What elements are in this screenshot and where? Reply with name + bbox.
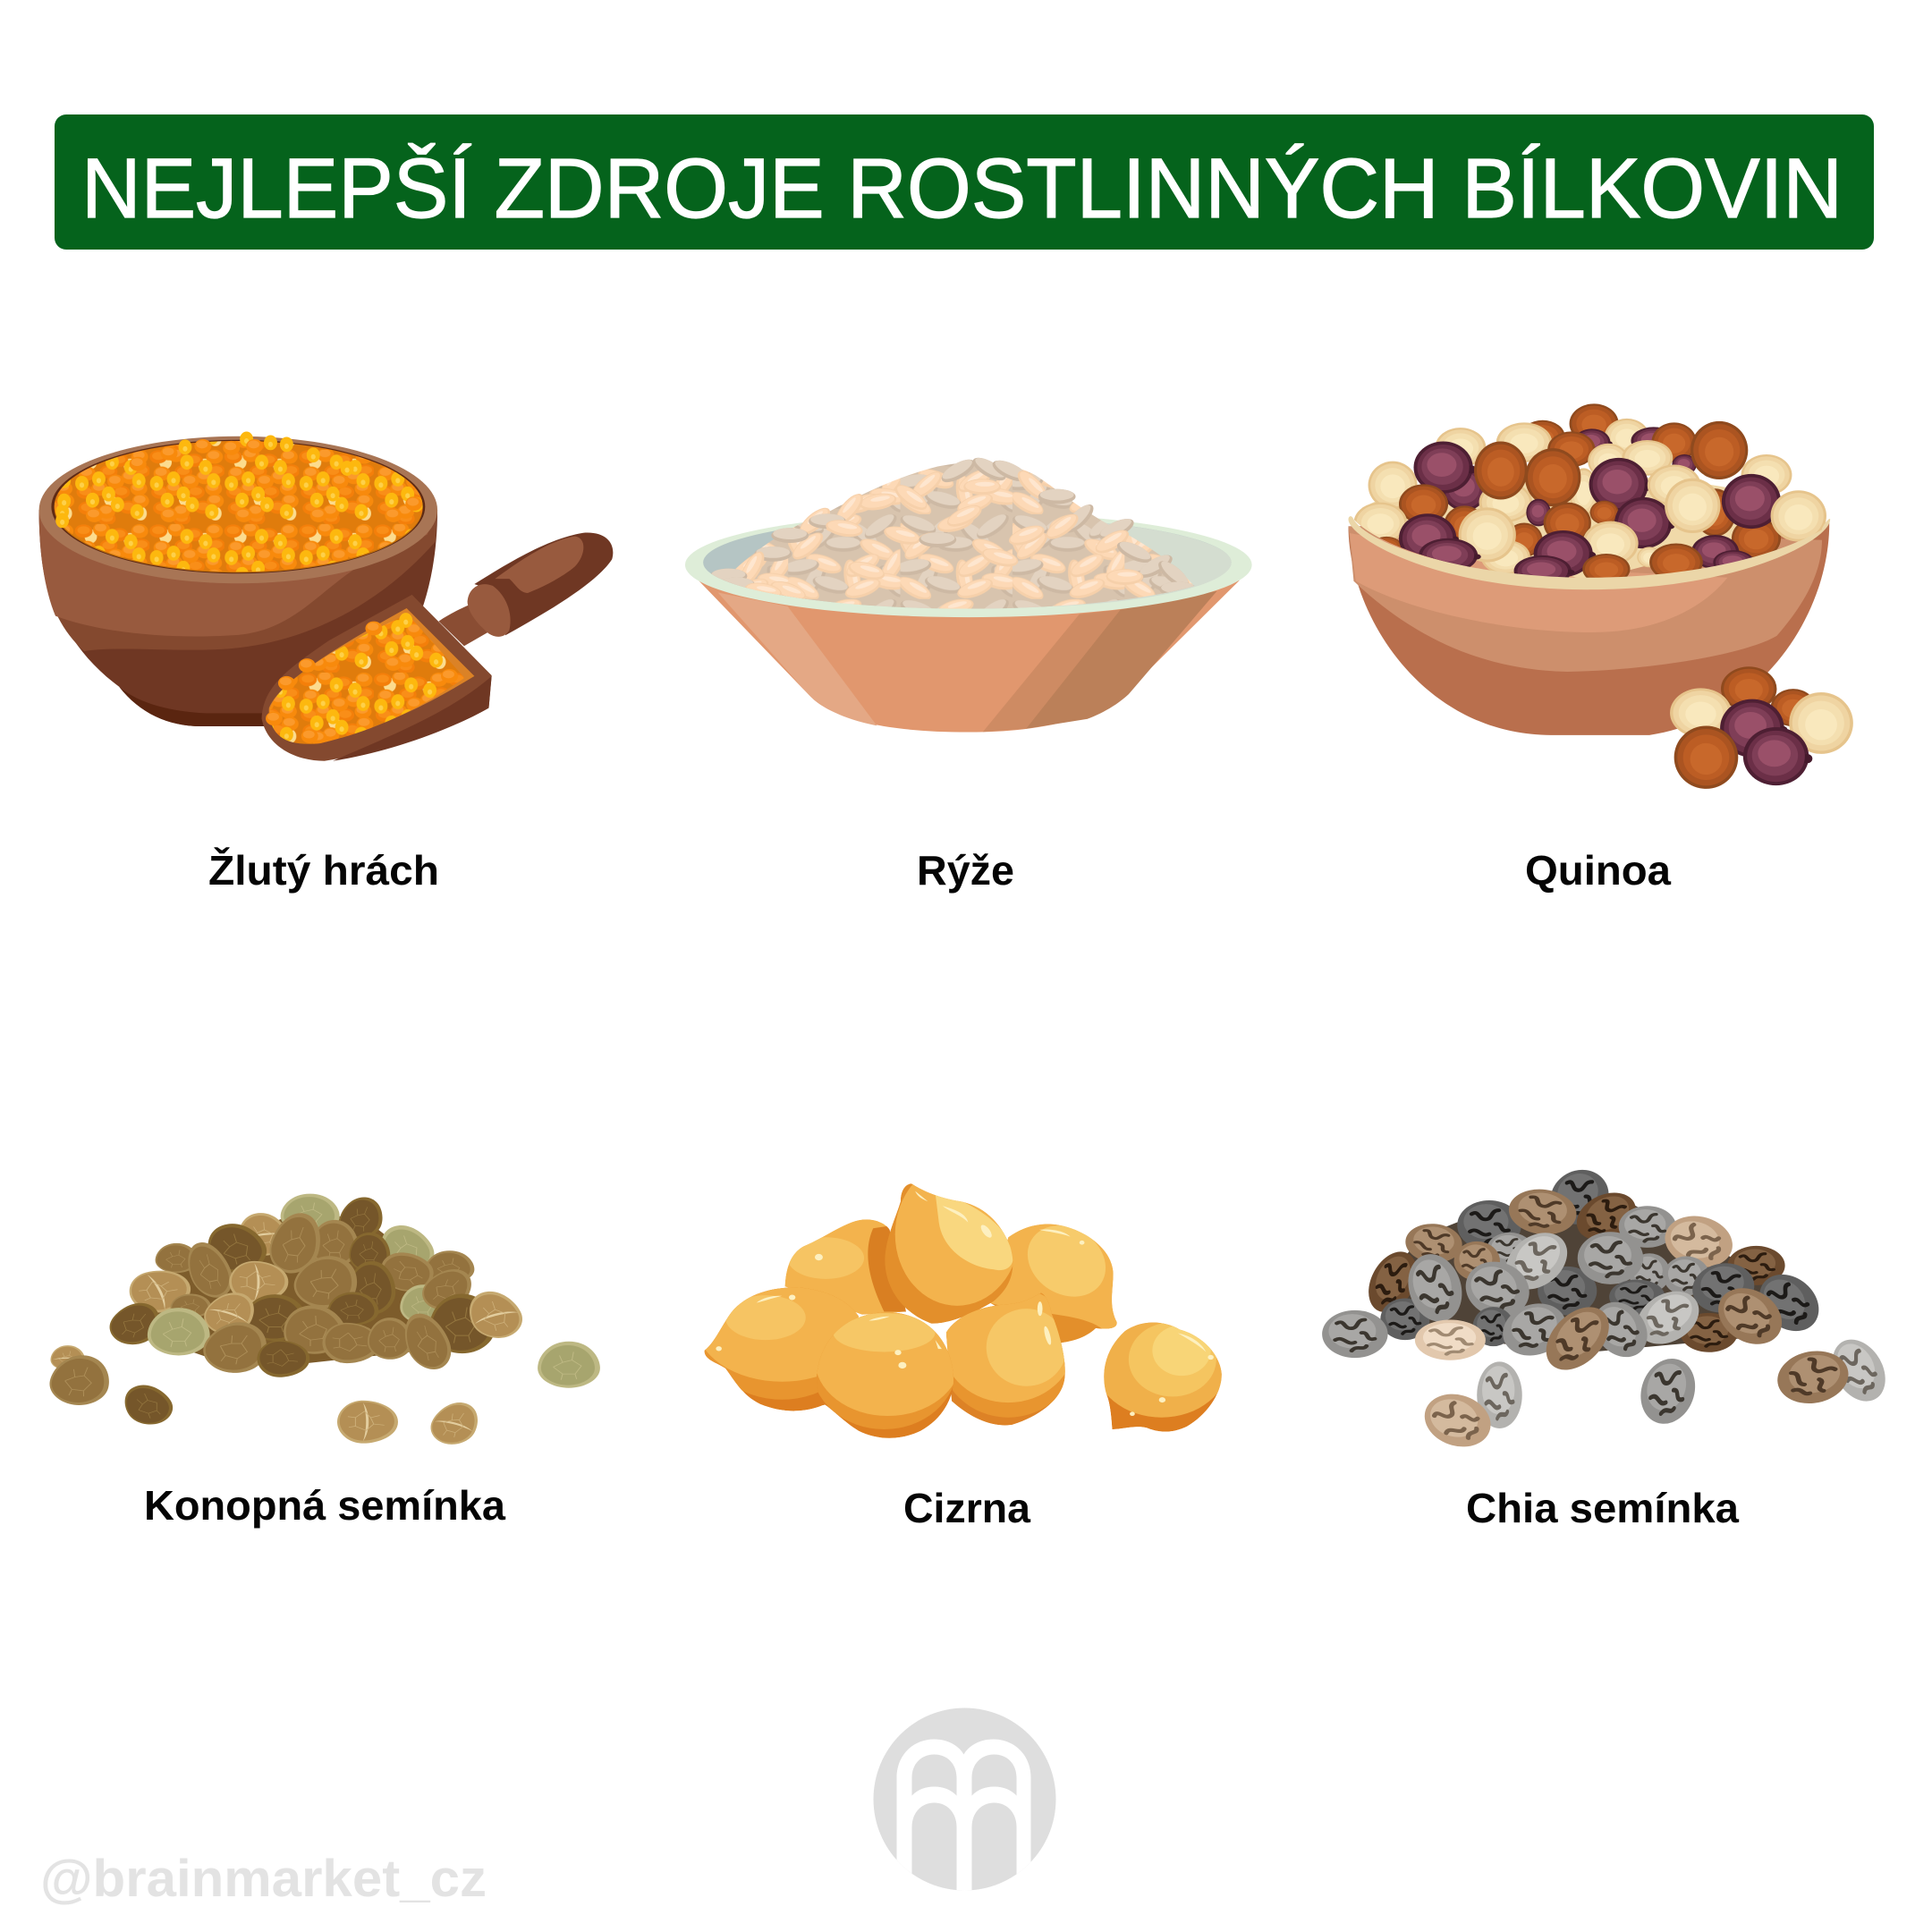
panel: rice bbox=[685, 453, 1252, 894]
icon: pile of chia seeds bbox=[1322, 1166, 1894, 1455]
title: NEJLEPŠÍ ZDROJE ROSTLINNÝCH BÍLKOVIN bbox=[81, 141, 1843, 236]
lentils in bowl bbox=[54, 432, 428, 573]
loose hemp seeds bbox=[45, 1342, 600, 1449]
quinoa seeds in bowl bbox=[1353, 403, 1826, 586]
icon: quinoa bowl bbox=[1349, 403, 1853, 789]
rice mound bbox=[711, 458, 1195, 608]
watermark handle: @brainmarket_cz bbox=[40, 1850, 487, 1908]
icon: wooden scoop bbox=[262, 533, 613, 761]
panel: chickpeas bbox=[705, 1183, 1222, 1522]
label: Rýže bbox=[917, 847, 1014, 894]
label: Konopná semínka bbox=[144, 1482, 505, 1529]
label: Cizrna bbox=[903, 1485, 1030, 1531]
panel: hemp seeds bbox=[45, 1194, 600, 1529]
label: Chia semínka bbox=[1466, 1485, 1739, 1531]
panel: yellow peas bbox=[39, 432, 613, 894]
label: Žlutý hrách bbox=[208, 847, 439, 894]
label: Quinoa bbox=[1525, 847, 1671, 894]
title bbox=[55, 114, 1874, 250]
panel: quinoa bbox=[1349, 403, 1853, 894]
icon: rice bowl bbox=[685, 513, 1252, 733]
logo bbox=[873, 1708, 1055, 1891]
loose quinoa seeds bbox=[1670, 666, 1853, 789]
icon: wooden bowl bbox=[39, 436, 437, 726]
icon: pile of chickpeas bbox=[705, 1183, 1222, 1438]
bowl rim bbox=[1349, 516, 1830, 589]
icon: pile of hemp seeds bbox=[45, 1194, 600, 1449]
loose chia seeds bbox=[1322, 1310, 1894, 1455]
lentils in scoop bbox=[266, 613, 465, 744]
panel: chia seeds bbox=[1322, 1166, 1894, 1531]
